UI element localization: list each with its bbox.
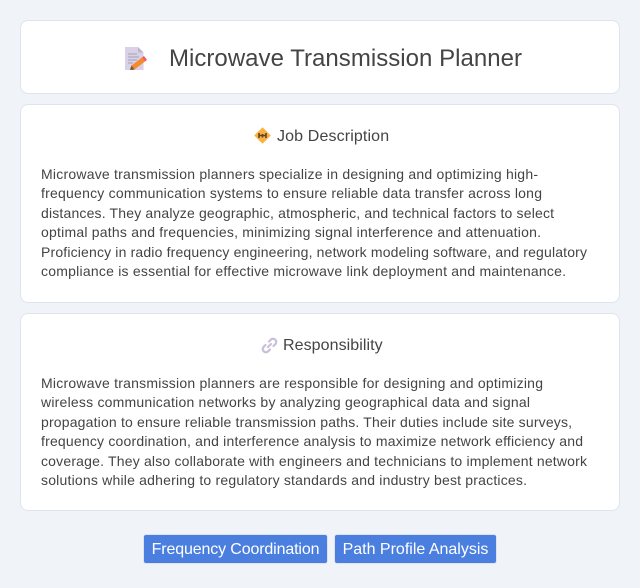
icon: chain link [262,338,278,354]
text block: job description: compliance is essential for effective microwave link deployment and maintenance. [41,263,566,279]
tag: frequency coordination: Frequency Coordination [152,541,319,558]
heading: responsibility: Responsibility [283,337,383,354]
text block: job description: Proficiency in radio frequency engineering, network modeling software, and regulatory [41,244,587,260]
icon: road sign diamond [254,127,271,144]
panel: title card [20,20,620,94]
text block: responsibility: coverage. They also collaborate with engineers and technicians to implement network [41,453,588,469]
text block: job description: optimal paths and frequencies, minimizing signal interference and attenuation. [41,224,541,240]
text block: responsibility: solutions while adhering to regulatory standards and industry best practices. [41,472,527,488]
text block: responsibility: wireless communication networks by analyzing geographical data and signal [40,394,530,410]
icon: document with pencil [125,47,147,70]
title: Microwave Transmission Planner [169,45,522,72]
text block: job description: distances. They analyze geographic, atmospheric, and technical factors to select [41,205,554,221]
text block: job description [41,166,587,279]
heading: job description: Job Description [277,128,389,145]
panel: responsibility [20,313,620,511]
text block: job description: Microwave transmission planners specialize in designing and optimizing high- [41,166,538,182]
text block: responsibility: propagation to ensure reliable transmission paths. Their duties include site surveys, [41,414,572,430]
text block: responsibility: frequency coordination, and interference analysis to maximize network efficiency and [41,433,583,449]
tag: path profile analysis: Path Profile Analysis [343,541,488,558]
tag: path profile analysis [334,534,497,564]
text block: job description: frequency communication systems to ensure reliable data transfer across long [41,185,542,201]
text block: responsibility: Microwave transmission planners are responsible for designing and optimizing [41,375,543,391]
tag: frequency coordination [143,534,328,564]
panel: job description [20,104,620,303]
text block: responsibility [40,375,588,488]
